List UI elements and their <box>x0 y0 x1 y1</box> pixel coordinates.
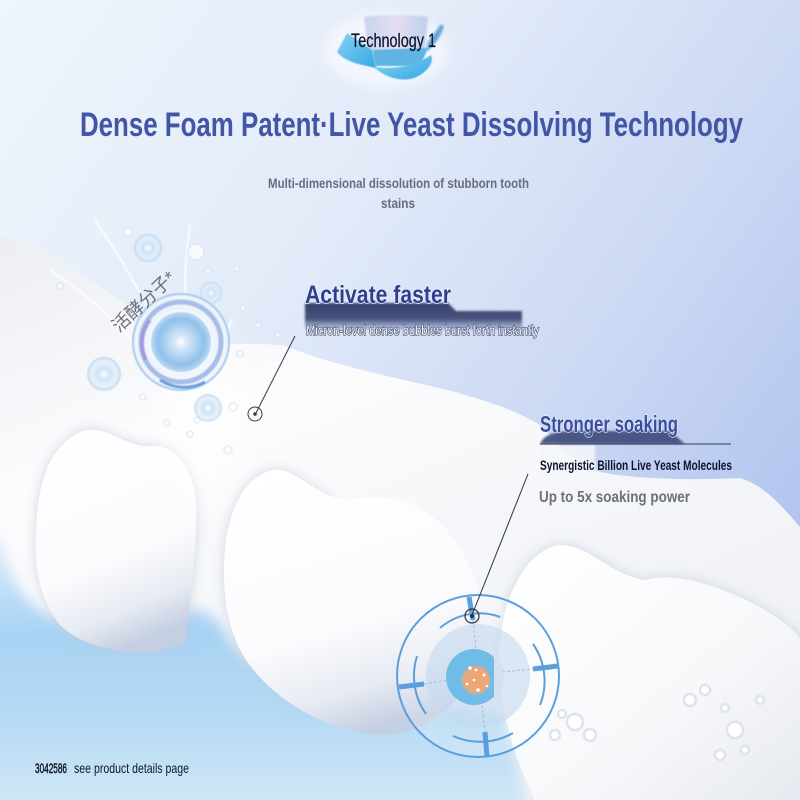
tooth: left <box>36 430 196 652</box>
gum <box>0 535 530 800</box>
subtitle: stains <box>381 195 415 211</box>
white patch <box>540 445 595 475</box>
callout: activate faster <box>305 281 539 338</box>
back tooth ridge <box>0 235 800 800</box>
icon: active yeast molecule <box>133 294 229 390</box>
footnote: see product details page <box>74 760 189 776</box>
molecule glow <box>145 310 265 530</box>
molecule label: 活酵分子* <box>108 267 180 336</box>
rule <box>540 443 731 445</box>
bubble cluster <box>87 234 222 422</box>
tooth: centre <box>224 470 483 735</box>
foam bubbles <box>550 685 764 760</box>
callout: stronger soaking <box>539 411 732 506</box>
light rays <box>50 220 232 490</box>
pointer: stronger soaking <box>465 474 528 623</box>
detail: Up to 5x soaking power <box>539 489 690 506</box>
body: Micron-level dense bubbles burst forth instantly <box>306 322 539 338</box>
subtitle <box>268 175 529 211</box>
subtitle: Multi-dimensional dissolution of stubborn tooth <box>268 175 529 191</box>
footnote: 3042586 <box>35 760 67 776</box>
footnote <box>35 760 189 776</box>
heading: Stronger soaking <box>540 411 678 437</box>
yeast cluster <box>462 666 490 694</box>
shadow block <box>540 431 685 444</box>
body: Synergistic Billion Live Yeast Molecules <box>540 457 732 473</box>
icon: yeast target reticle <box>397 595 559 757</box>
tooth shadows <box>36 430 800 715</box>
badge label: Technology 1 <box>351 31 436 52</box>
tooth: right <box>499 545 800 800</box>
pointer: activate faster <box>248 336 295 421</box>
floating droplets <box>57 228 280 454</box>
icon: title ribbon badge <box>324 12 448 88</box>
shadow block <box>305 303 522 330</box>
heading: Activate faster <box>305 281 451 309</box>
